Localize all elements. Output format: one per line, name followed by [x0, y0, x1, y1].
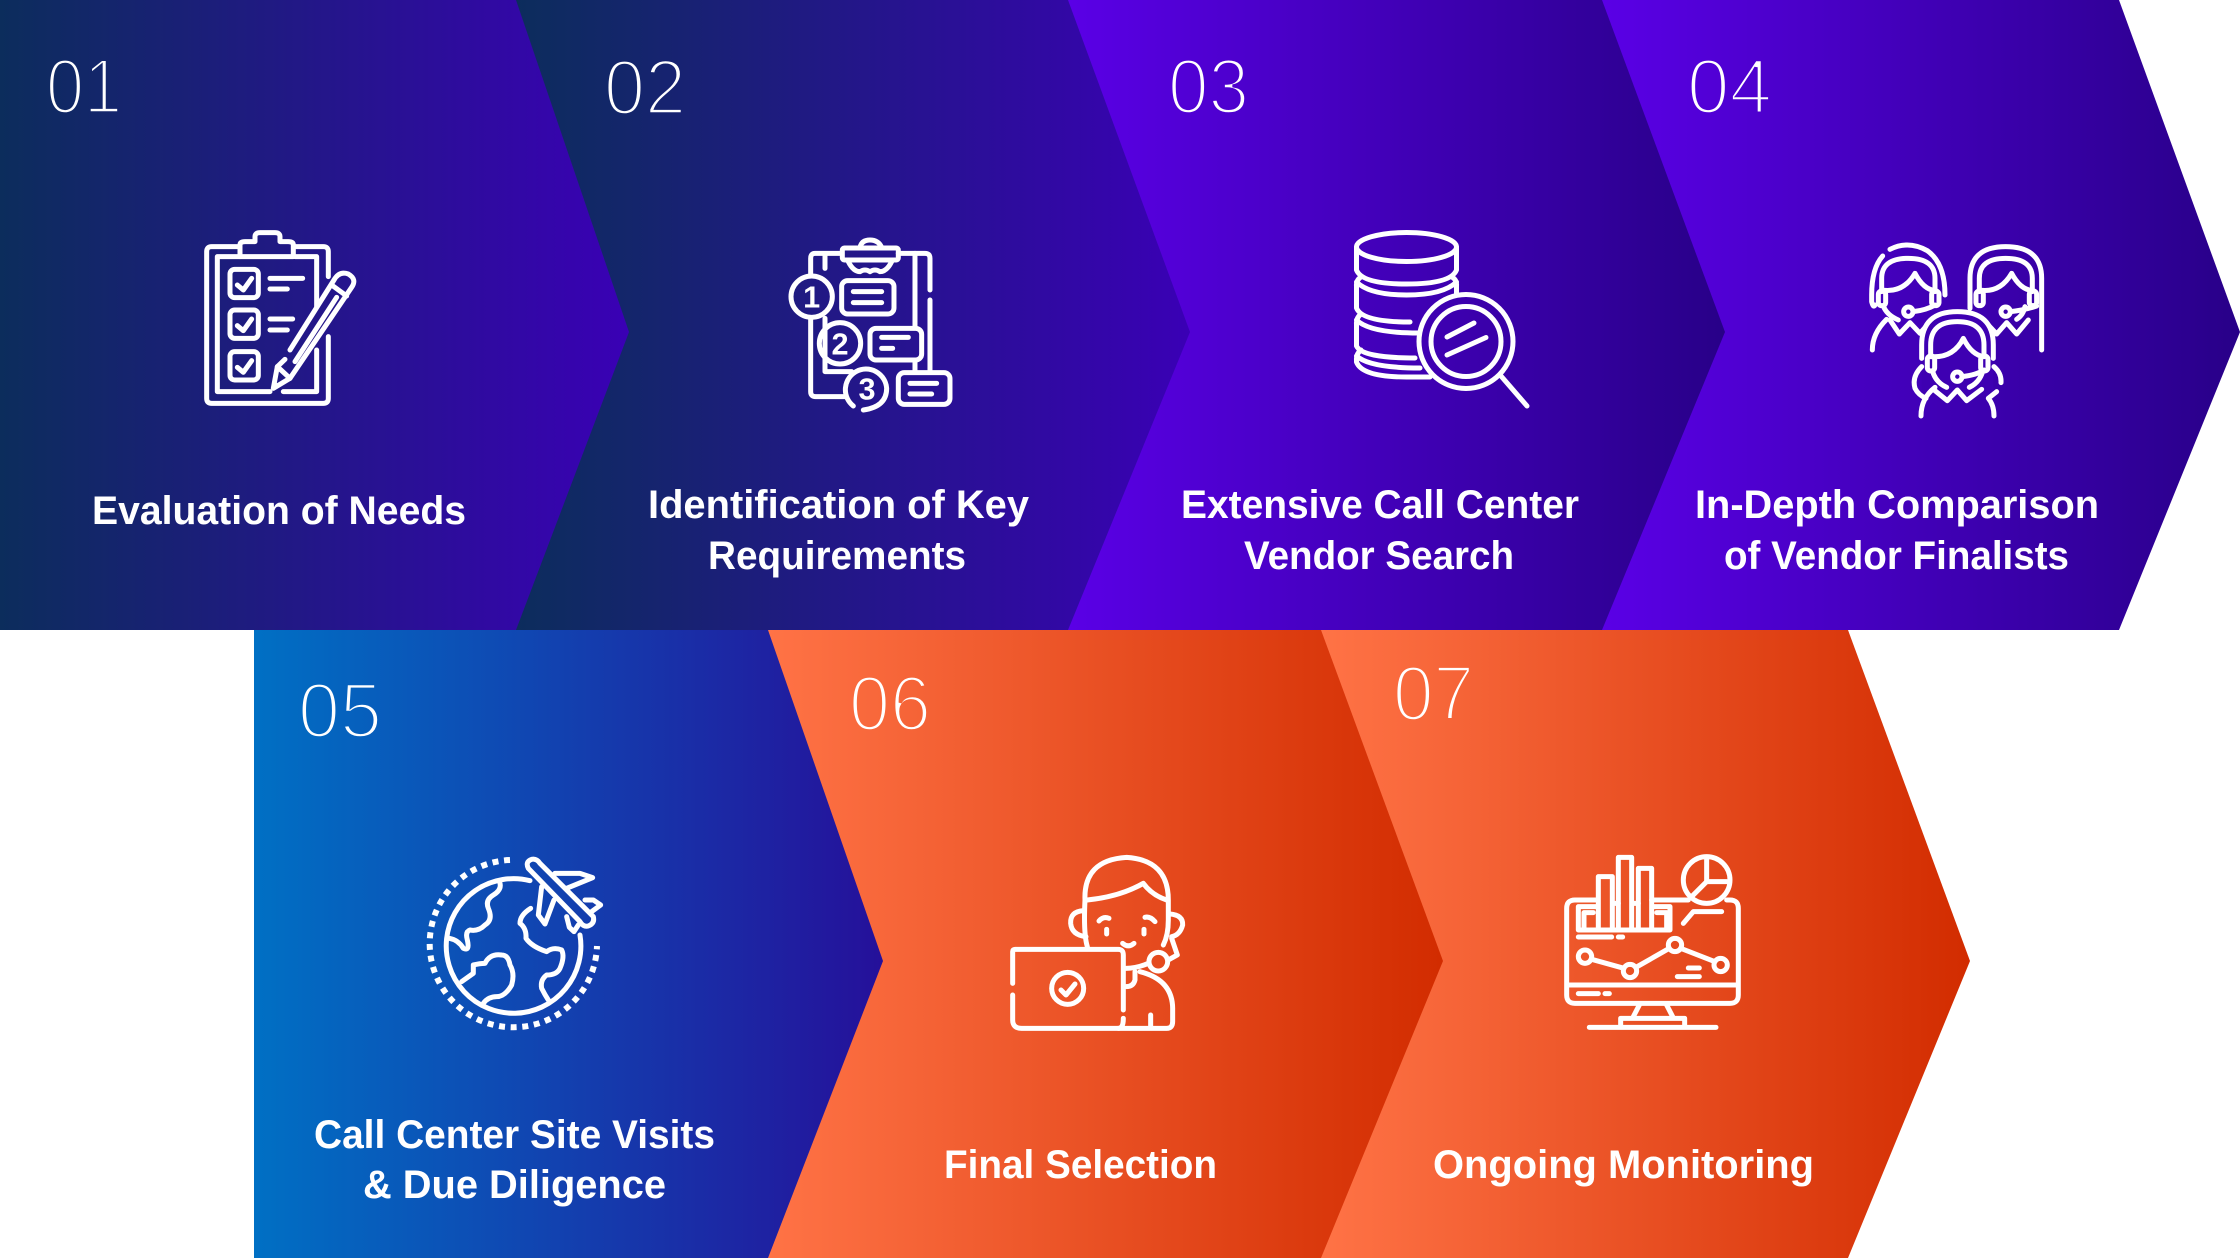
label 03: Vendor Search	[1244, 534, 1514, 578]
label 02: Identification of Key	[648, 483, 1030, 527]
label 02: Requirements	[708, 534, 966, 578]
label 03: Extensive Call Center	[1181, 483, 1579, 527]
panel: step 01	[0, 0, 629, 630]
number 04: 04	[1687, 42, 1772, 130]
number 02: 02	[604, 43, 686, 131]
panel: step 02	[516, 0, 1190, 630]
number 06: 06	[849, 659, 931, 747]
panel: step 03	[1068, 0, 1725, 630]
panel: step 04	[1602, 0, 2240, 630]
label 05: & Due Diligence	[363, 1163, 666, 1207]
digits in icon	[803, 281, 876, 406]
number 01: 01	[46, 42, 122, 130]
icon: numbered requirements clipboard	[791, 240, 950, 410]
chevron 06	[768, 630, 1443, 1258]
label 04: In-Depth Comparison	[1695, 483, 2099, 527]
label 04	[1695, 483, 2099, 578]
label 04: of Vendor Finalists	[1724, 534, 2069, 578]
icon: call center agents	[1872, 245, 2042, 416]
chevron 05	[254, 630, 883, 1258]
digits in icon: 3	[858, 372, 876, 406]
icon: checklist clipboard with pencil	[207, 233, 354, 403]
label 05: Call Center Site Visits	[314, 1113, 715, 1157]
icon: agent with laptop	[1013, 857, 1183, 1028]
chevron 07	[1321, 630, 1970, 1258]
panel: step 05	[254, 630, 883, 1258]
chevron 04	[1602, 0, 2240, 630]
number 03: 03	[1168, 42, 1249, 130]
icon: database search	[1356, 232, 1527, 406]
label 02	[648, 483, 1030, 578]
panel: step 06	[768, 630, 1443, 1258]
number 05: 05	[298, 666, 382, 754]
chevron 01	[0, 0, 629, 630]
label 06: Final Selection	[944, 1143, 1217, 1187]
label 01: Evaluation of Needs	[92, 489, 466, 533]
icon: globe with airplane	[430, 859, 601, 1027]
digits in icon: 1	[803, 281, 820, 315]
panel: step 07	[1321, 630, 1970, 1258]
label 05	[314, 1113, 715, 1207]
chevron 02	[516, 0, 1190, 630]
number 07: 07	[1393, 649, 1474, 737]
chevron 03	[1068, 0, 1725, 630]
digits in icon: 2	[831, 327, 849, 361]
label 07: Ongoing Monitoring	[1433, 1143, 1814, 1187]
label 03	[1181, 483, 1579, 578]
icon: monitoring dashboard	[1567, 857, 1738, 1027]
